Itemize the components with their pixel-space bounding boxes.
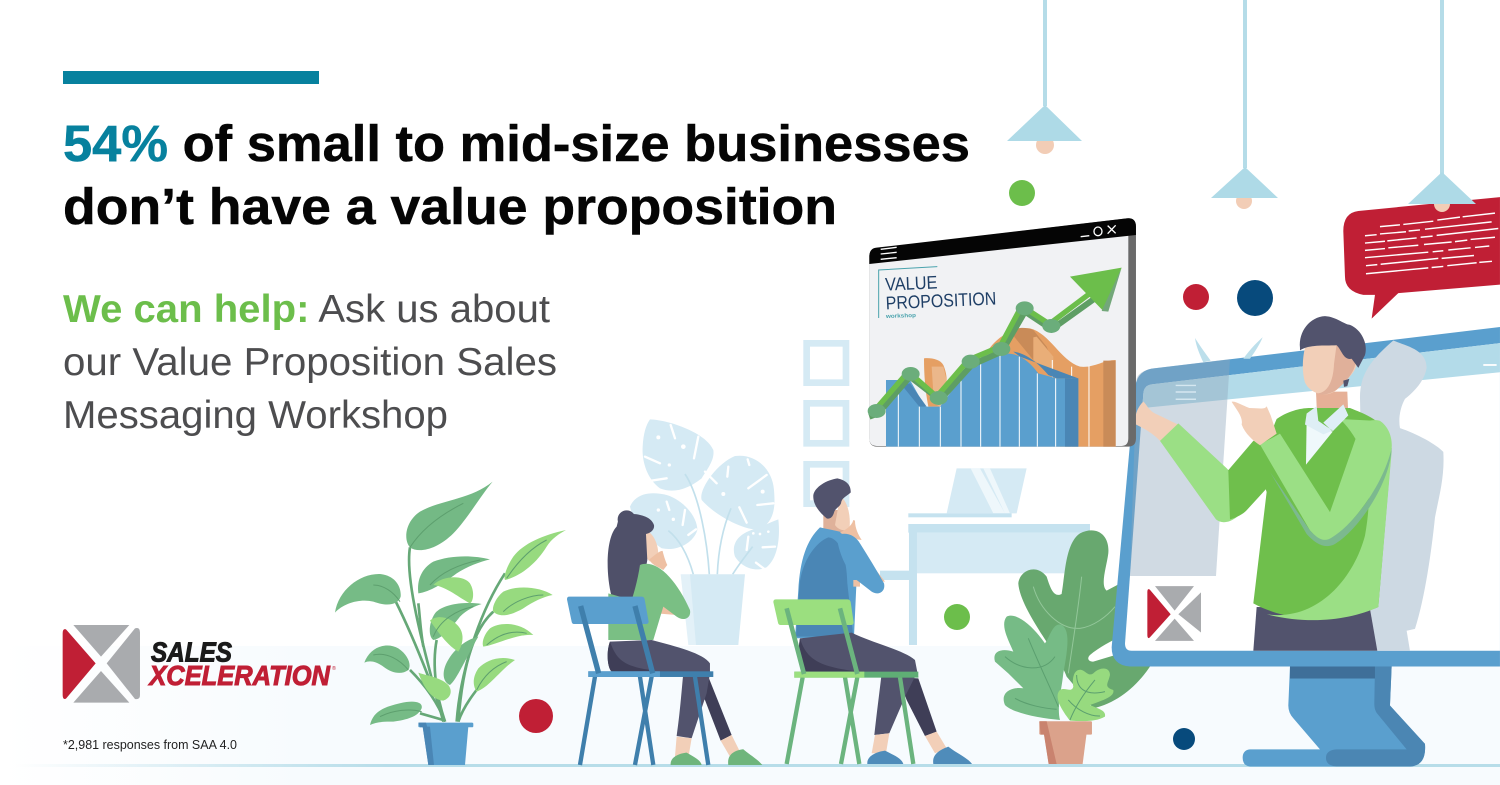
subheading xyxy=(63,288,557,437)
logo: Sales Xceleration: XCELERATION xyxy=(148,660,331,691)
background desk and laptop xyxy=(880,468,1090,645)
subheading: We can help: Ask us about xyxy=(63,288,550,331)
presenter shadow xyxy=(1360,341,1444,651)
woman sitting on blue chair xyxy=(567,510,762,765)
headline: 54% of small to mid-size businesses xyxy=(63,115,970,172)
hanging lamps xyxy=(1007,0,1476,212)
foreground plant with blue pot xyxy=(335,482,566,765)
headline: don’t have a value proposition xyxy=(63,178,837,235)
logo: Sales Xceleration: SALES xyxy=(151,637,232,668)
subheading: Messaging Workshop xyxy=(63,394,448,437)
workshop title xyxy=(879,267,997,320)
man sitting on green chair xyxy=(773,478,972,764)
logo: Sales Xceleration: ® xyxy=(332,665,336,672)
workshop title: PROPOSITION xyxy=(885,288,997,313)
monitor stand xyxy=(1243,666,1425,766)
presenter xyxy=(1135,316,1392,651)
subheading: our Value Proposition Sales xyxy=(63,341,557,384)
green chair xyxy=(773,599,918,764)
monitor xyxy=(1112,327,1500,766)
floor background xyxy=(0,646,1500,785)
wall squares xyxy=(807,343,846,504)
background plant: monstera xyxy=(630,419,779,645)
area bars xyxy=(886,328,1116,447)
blue chair xyxy=(567,597,713,765)
headline xyxy=(63,115,970,235)
footnote: *2,981 responses from SAA 4.0 xyxy=(63,738,237,752)
office logo on monitor xyxy=(1147,586,1201,641)
window controls xyxy=(881,225,1116,259)
logo: Sales Xceleration xyxy=(63,625,336,703)
growth arrow xyxy=(868,268,1122,418)
workshop title: workshop xyxy=(885,313,917,320)
decorative dots xyxy=(519,180,1273,750)
plant with terracotta pot xyxy=(994,530,1150,764)
workshop title: VALUE xyxy=(885,271,938,295)
accent bar xyxy=(63,71,319,84)
browser window chart xyxy=(868,218,1136,447)
speech bubble xyxy=(1343,197,1500,319)
